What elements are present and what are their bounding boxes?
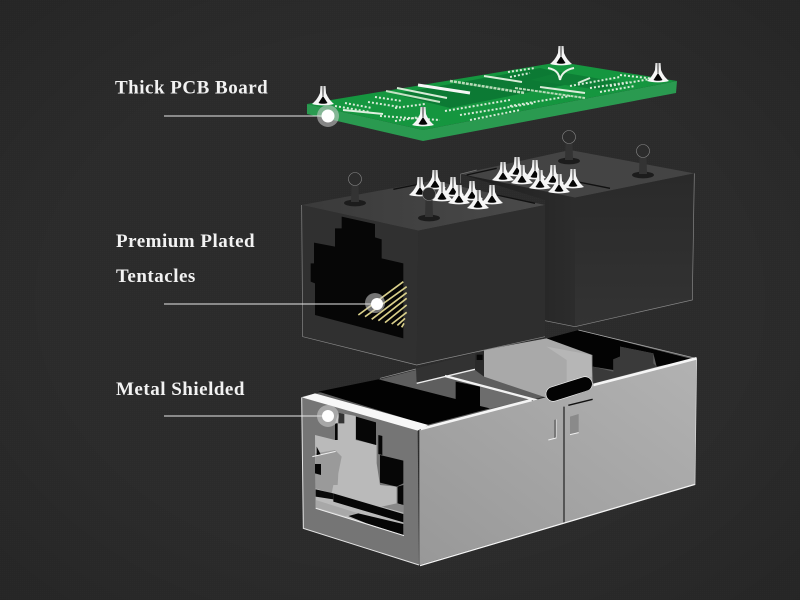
label: Metal Shielded: Metal Shielded [116, 379, 245, 400]
leader line [164, 415, 322, 417]
front black connector block [302, 181, 545, 365]
leader line [164, 115, 322, 117]
shield interior [302, 330, 697, 428]
marker dot [317, 105, 339, 127]
shield latch [553, 384, 593, 405]
shield front face [302, 393, 428, 565]
callout: Thick PCB Board [115, 78, 339, 127]
leader line [164, 303, 372, 305]
front pegs [344, 172, 440, 221]
PCB traces [335, 68, 665, 121]
callout: Premium Plated Tentacles [116, 231, 385, 313]
green PCB board [307, 62, 677, 141]
marker dot [365, 293, 385, 313]
RJ45 socket opening [311, 217, 403, 338]
label: Premium Plated Tentacles: Premium Plated [116, 231, 255, 252]
PCB mounting pins [312, 46, 669, 126]
block right face [417, 205, 545, 365]
PCB edge [307, 81, 677, 141]
front contact pins [409, 170, 503, 209]
marker dot [317, 405, 339, 427]
callout: Metal Shielded [116, 379, 339, 427]
gold contacts [358, 282, 407, 327]
block left face [302, 205, 418, 365]
rear black connector block [461, 150, 694, 327]
shield side wall [419, 358, 697, 565]
shield bright edges [420, 358, 697, 566]
rear contact pins [492, 157, 584, 193]
label: Thick PCB Board: Thick PCB Board [115, 78, 268, 98]
label: Premium Plated Tentacles: Tentacles [116, 266, 196, 287]
rear pegs [558, 130, 654, 178]
block top face [302, 181, 545, 231]
label: Premium Plated Tentacles [116, 231, 255, 287]
PCB top surface [307, 62, 677, 130]
metal shield housing [302, 330, 697, 566]
shield seam and slots [548, 407, 579, 523]
